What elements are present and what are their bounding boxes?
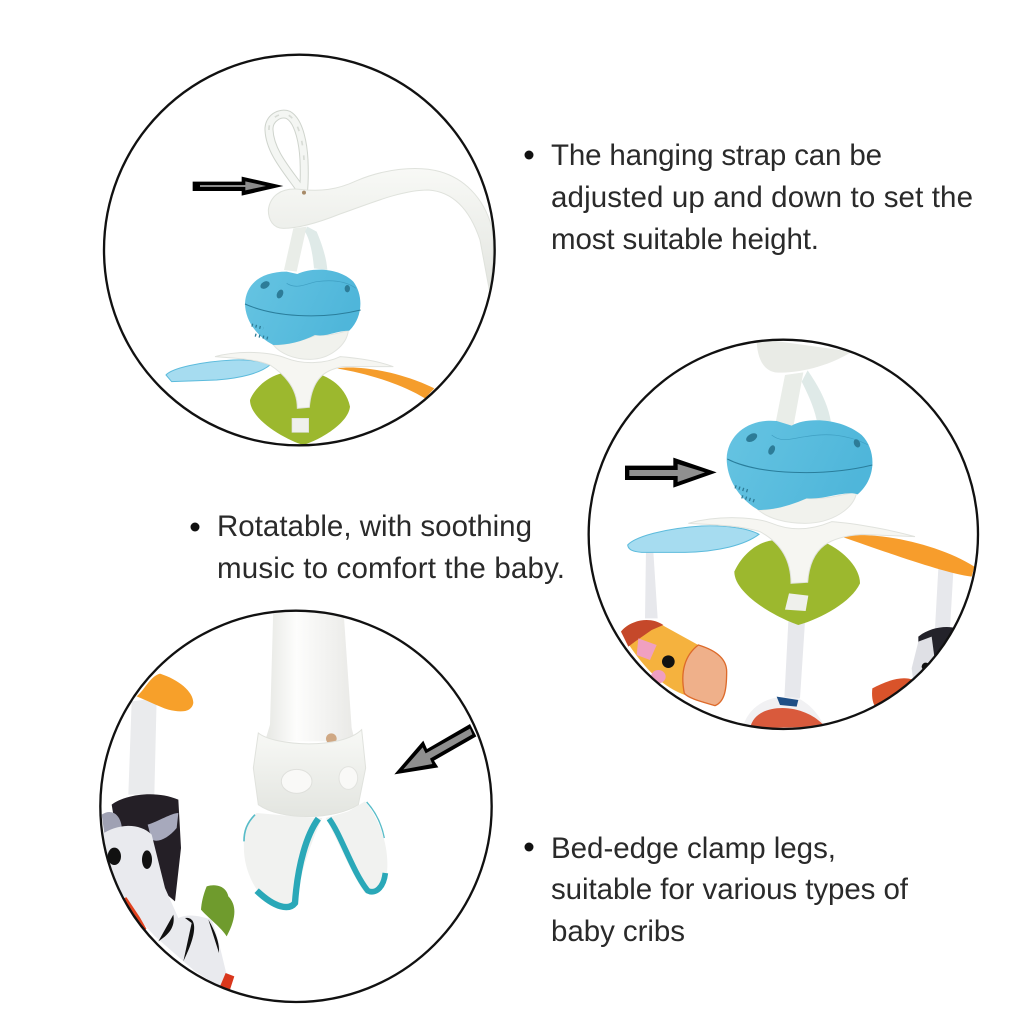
text block: clamp legs xyxy=(524,832,909,948)
arrow: pointing at music box xyxy=(625,458,717,488)
icon: zebra toy xyxy=(872,627,957,710)
icon: giraffe toy xyxy=(621,620,727,706)
icon: straps below xyxy=(645,548,953,698)
icon: blue music box xyxy=(727,420,872,523)
icon: white tag xyxy=(292,418,309,432)
icon: arm straps xyxy=(284,227,327,272)
icon: green leaf xyxy=(250,372,350,445)
icon: blue leaf xyxy=(628,526,759,552)
text block: rotatable music: music to comfort the baby. xyxy=(217,552,565,585)
icon: arm straps xyxy=(776,370,831,427)
text block: hanging strap xyxy=(524,139,973,256)
circle outline xyxy=(100,611,492,1002)
circle outline xyxy=(104,55,495,445)
icon: clamp leg left xyxy=(244,813,322,909)
icon: strap knot xyxy=(302,191,306,195)
icon: white cross frame xyxy=(215,352,393,408)
icon: curved arm xyxy=(268,169,493,290)
icon: white tag xyxy=(785,593,808,611)
icon: arm end xyxy=(757,338,852,373)
text block: clamp legs: suitable for various types of xyxy=(551,873,909,906)
icon: white cross frame xyxy=(688,518,915,583)
icon: orange leaf xyxy=(337,367,434,398)
bullet xyxy=(524,150,534,160)
icon: clamp collar xyxy=(253,730,366,817)
icon: clamp leg right xyxy=(326,801,387,894)
text block: rotatable music: Rotatable, with soothing xyxy=(217,510,532,543)
arrow: pointing at clamp legs xyxy=(394,724,476,774)
bullet xyxy=(524,842,534,852)
icon: blue leaf xyxy=(166,360,270,382)
bullet xyxy=(190,522,200,532)
text block: hanging strap: adjusted up and down to set the xyxy=(551,181,973,214)
text block: hanging strap: most suitable height. xyxy=(551,223,819,256)
text block: clamp legs: Bed-edge clamp legs, xyxy=(551,832,836,865)
icon: fabric strap xyxy=(128,698,157,795)
arrow: pointing at strap xyxy=(193,177,283,196)
icon: orange leaf tip xyxy=(137,674,193,711)
icon: green leaf xyxy=(734,540,860,625)
icon: tube hole xyxy=(326,733,337,744)
text block: clamp legs: baby cribs xyxy=(551,915,685,948)
panel: music box circle xyxy=(589,338,978,729)
icon: bottom toy xyxy=(743,697,825,728)
circle outline xyxy=(589,340,978,729)
panel: clamp legs circle xyxy=(100,608,492,1002)
text block: hanging strap: The hanging strap can be xyxy=(551,139,882,172)
icon: white tube xyxy=(265,608,355,741)
icon: blue music box xyxy=(245,270,361,359)
panel: hanging strap circle xyxy=(104,55,495,445)
text block: rotatable music xyxy=(190,510,565,585)
icon: orange leaf xyxy=(842,535,974,577)
icon: zebra toy xyxy=(102,794,234,990)
icon: strap loop xyxy=(269,114,304,193)
